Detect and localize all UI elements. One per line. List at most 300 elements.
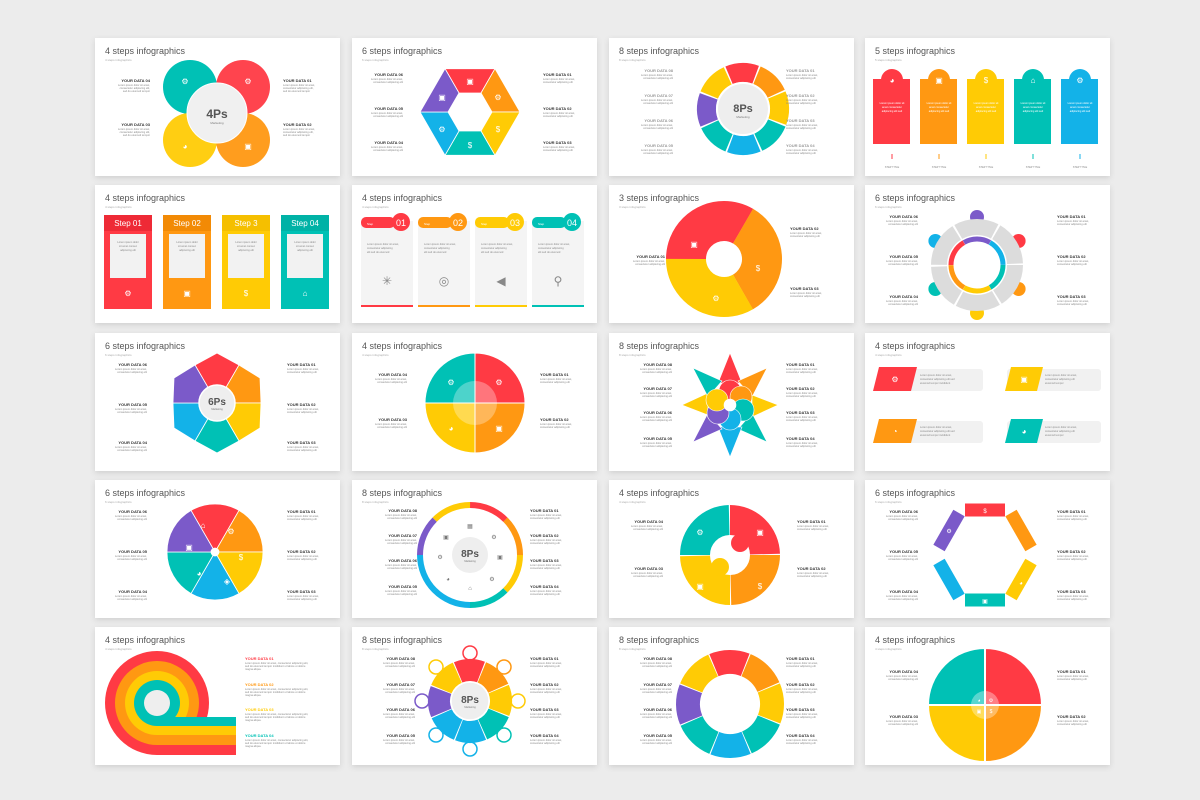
- slide 14: 8Ps thin ring: Lorem ipsum dolor sit amet,: [385, 563, 417, 567]
- slide 9: 6Ps star: Lorem ipsum dolor sit amet,: [287, 367, 319, 371]
- slide 1: 4Ps venn: sed do eiusmod tempor: [283, 89, 310, 93]
- slide 9: 6Ps star: Lorem ipsum dolor sit amet,: [115, 445, 147, 449]
- slide 11: 8 steps star: Lorem ipsum dolor sit amet,: [640, 441, 672, 445]
- slide 4: 5 steps tabs: Lorem ipsum dolor sit: [1068, 101, 1093, 105]
- slide 14: 8Ps thin ring: consectetur adipiscing elit: [387, 541, 417, 545]
- slide 8: 6 steps ring: Lorem ipsum dolor sit amet,: [1057, 259, 1089, 263]
- slide 17: rainbow spiral: magna aliqua.: [245, 744, 262, 748]
- slide 8: 6 steps ring: Lorem ipsum dolor sit amet,: [886, 259, 918, 263]
- slide 9: 6Ps star: Lorem ipsum dolor sit amet,: [287, 445, 319, 449]
- slide 11: 8 steps star: YOUR DATA 04: [786, 436, 815, 441]
- slide 10: 4 quadrant pie: 4 steps infographics: [362, 341, 443, 351]
- slide 19: 8 steps donut: Lorem ipsum dolor sit amet,: [640, 738, 672, 742]
- slide 11: 8 steps star: Lorem ipsum dolor sit amet,: [786, 415, 818, 419]
- slide 11: 8 steps star: consectetur adipiscing elit: [642, 370, 672, 374]
- slide 13: 6 steps fan: consectetur adipiscing elit: [117, 517, 147, 521]
- slide 2: 6 steps hexagon: ▣: [438, 93, 446, 102]
- slide 4: 5 steps tabs: STEP TITLE: [932, 165, 946, 169]
- slide 16: 6 steps hexagon outline: Lorem ipsum dolor sit amet,: [886, 514, 918, 518]
- slide 18: 8Ps with tabs: 8 steps infographics: [362, 635, 443, 645]
- slide 19: 8 steps donut: consectetur adipiscing elit: [786, 715, 816, 719]
- slide 14: 8Ps thin ring: Lorem ipsum dolor sit amet,: [530, 538, 562, 542]
- slide 12: 4 parallelogram items: Lorem ipsum dolor sit amet,: [1045, 425, 1077, 429]
- slide 13: 6 steps fan: Lorem ipsum dolor sit amet,: [287, 594, 319, 598]
- slide 5: step columns: adipiscing elit: [297, 248, 313, 252]
- slide 10: 4 quadrant pie: 4 steps infographics: [362, 353, 389, 357]
- slide 14: 8Ps thin ring: consectetur adipiscing elit: [530, 592, 560, 596]
- slide 1: 4Ps venn: Lorem ipsum dolor sit amet,: [118, 127, 150, 131]
- slide 4: 5 steps tabs: 5 steps infographics: [875, 46, 956, 56]
- slide 4: 5 steps tabs: amet consectetur: [1070, 105, 1090, 109]
- slide 17: rainbow spiral: sed do eiusmod tempor incididunt ut labore et dolore: [245, 715, 306, 719]
- slide 13: 6 steps fan: Lorem ipsum dolor sit amet,: [287, 554, 319, 558]
- slide 5: step columns: sit amet consec: [178, 244, 197, 248]
- slide 4: 5 steps tabs: Lorem ipsum dolor sit: [880, 101, 905, 105]
- slide 10: 4 quadrant pie: ◕: [449, 424, 454, 433]
- slide 2: 6 steps hexagon: ⚙: [438, 125, 446, 134]
- slide 14: 8Ps thin ring: 8 steps infographics: [362, 500, 389, 504]
- slide 4: 5 steps tabs: Lorem ipsum dolor sit: [1021, 101, 1046, 105]
- slide 16: 6 steps hexagon outline: YOUR DATA 02: [1057, 549, 1086, 554]
- slide 6: step cards: elit sed do eiusmod: [424, 250, 447, 254]
- slide 5: step columns: Step 04: [291, 219, 319, 228]
- slide 6: step cards: elit sed do eiusmod: [367, 250, 390, 254]
- slide 6: step cards: ◎: [439, 274, 449, 288]
- slide 12: 4 parallelogram items: Lorem ipsum dolor sit amet,: [920, 425, 952, 429]
- slide 2: 6 steps hexagon: consectetur adipiscing elit: [543, 148, 573, 152]
- slide 3: 8Ps donut: [609, 38, 854, 176]
- slide 1: 4Ps venn: 4 steps infographics: [105, 46, 186, 56]
- slide 3: 8Ps donut: Lorem ipsum dolor sit amet,: [641, 123, 673, 127]
- slide 2: 6 steps hexagon: consectetur adipiscing elit: [543, 114, 573, 118]
- slide 16: 6 steps hexagon outline: YOUR DATA 03: [1057, 589, 1086, 594]
- slide 18: 8Ps with tabs: Lorem ipsum dolor sit amet,: [383, 687, 415, 691]
- slide 19: 8 steps donut: 8 steps infographics: [619, 647, 646, 651]
- slide 11: 8 steps star: Lorem ipsum dolor sit amet,: [786, 391, 818, 395]
- slide 19: 8 steps donut: YOUR DATA 07: [643, 682, 673, 687]
- slide 14: 8Ps thin ring: Lorem ipsum dolor sit amet,: [385, 589, 417, 593]
- slide 4: 5 steps tabs: ⚙: [1076, 76, 1084, 85]
- slide 12: 4 parallelogram items: ◔: [893, 427, 898, 436]
- slide 20: 4 quadrant circle: ⚙: [989, 698, 994, 704]
- slide 9: 6Ps star: consectetur adipiscing elit: [117, 448, 147, 452]
- slide 15: 4 steps puzzle ring: $: [758, 582, 763, 591]
- slide 16: 6 steps hexagon outline: 6 steps infographics: [875, 488, 956, 498]
- slide 11: 8 steps star: YOUR DATA 07: [643, 386, 673, 391]
- slide 14: 8Ps thin ring: ⌂: [468, 586, 472, 592]
- slide 2: 6 steps hexagon: Lorem ipsum dolor sit amet,: [371, 77, 403, 81]
- slide 3: 8Ps donut: YOUR DATA 06: [644, 118, 674, 123]
- slide 9: 6Ps star: Lorem ipsum dolor sit amet,: [115, 367, 147, 371]
- slide 7: 3 steps puzzle circle: ▣: [690, 240, 698, 249]
- slide 4: 5 steps tabs: adipiscing elit sed: [976, 109, 997, 113]
- slide 19: 8 steps donut: 8 steps infographics: [619, 635, 700, 645]
- slide 3: 8Ps donut: consectetur adipiscing elit: [786, 151, 816, 155]
- slide 4: 5 steps tabs: 5 steps infographics: [875, 58, 902, 62]
- slide 1: 4Ps venn: Lorem ipsum dolor sit amet,: [283, 83, 315, 87]
- slide 1: 4Ps venn: consectetur adipiscing elit,: [120, 86, 150, 90]
- slide 1: 4Ps venn: YOUR DATA 04: [121, 78, 151, 83]
- slide 2: 6 steps hexagon: YOUR DATA 05: [374, 106, 404, 111]
- slide 17: rainbow spiral: magna aliqua.: [245, 693, 262, 697]
- slide 17: rainbow spiral: sed do eiusmod tempor incididunt ut labore et dolore: [245, 741, 306, 745]
- slide 14: 8Ps thin ring: consectetur adipiscing elit: [530, 566, 560, 570]
- slide 3: 8Ps donut: 8Ps: [733, 103, 753, 115]
- slide 16: 6 steps hexagon outline: ▣: [982, 599, 988, 605]
- slide 2: 6 steps hexagon: $: [496, 125, 501, 134]
- slide 4: 5 steps tabs: STEP TITLE: [885, 165, 899, 169]
- slide 6: step cards: 4 steps infographics: [362, 193, 443, 203]
- slide 3: 8Ps donut: YOUR DATA 01: [786, 68, 815, 73]
- slide 11: 8 steps star: Lorem ipsum dolor sit amet,: [640, 391, 672, 395]
- slide 9: 6Ps star: consectetur adipiscing elit: [287, 448, 317, 452]
- slide 11: 8 steps star: 8 steps infographics: [619, 341, 700, 351]
- slide 4: 5 steps tabs: [865, 38, 1110, 176]
- slide 20: 4 quadrant circle: Lorem ipsum dolor sit amet,: [886, 674, 918, 678]
- slide 14: 8Ps thin ring: [352, 480, 597, 626]
- slide 5: step columns: adipiscing elit: [179, 248, 195, 252]
- slide 16: 6 steps hexagon outline: YOUR DATA 06: [889, 509, 919, 514]
- slide 2: 6 steps hexagon: consectetur adipiscing elit: [543, 80, 573, 84]
- slide 19: 8 steps donut: consectetur adipiscing elit: [786, 664, 816, 668]
- slide 18: 8Ps with tabs: Lorem ipsum dolor sit amet,: [383, 738, 415, 742]
- slide 3: 8Ps donut: YOUR DATA 03: [786, 118, 815, 123]
- slide 6: step cards: Step: [481, 222, 488, 226]
- slide 3: 8Ps donut: YOUR DATA 05: [644, 143, 674, 148]
- slide 12: 4 parallelogram items: consectetur adipiscing elit: [1045, 429, 1075, 433]
- slide 3: 8Ps donut: Lorem ipsum dolor sit amet,: [786, 73, 818, 77]
- slide 8: 6 steps ring: [865, 185, 1110, 323]
- slide 6: step cards: Lorem ipsum dolor sit amet,: [481, 242, 513, 246]
- slide 18: 8Ps with tabs: Lorem ipsum dolor sit amet,: [530, 661, 562, 665]
- slide 8: 6 steps ring: consectetur adipiscing elit: [1057, 302, 1087, 306]
- slide 1: 4Ps venn: YOUR DATA 03: [121, 122, 151, 127]
- slide 14: 8Ps thin ring: YOUR DATA 02: [530, 533, 559, 538]
- slide 10: 4 quadrant pie: ⚙: [495, 378, 503, 387]
- slide 3: 8Ps donut: Lorem ipsum dolor sit amet,: [786, 123, 818, 127]
- slide 6: step cards: Step: [424, 222, 431, 226]
- slide 7: 3 steps puzzle circle: Lorem ipsum dolor sit amet,: [790, 231, 822, 235]
- slide 17: rainbow spiral: sed do eiusmod tempor incididunt ut labore et dolore: [245, 664, 306, 668]
- slide 19: 8 steps donut: YOUR DATA 02: [786, 682, 815, 687]
- slide 17: rainbow spiral: YOUR DATA 02: [245, 682, 274, 687]
- slide 1: 4Ps venn: sed do eiusmod tempor: [123, 89, 150, 93]
- slide 5: step columns: sit amet consec: [237, 244, 256, 248]
- slide 1: 4Ps venn: consectetur adipiscing elit,: [283, 130, 314, 134]
- slide 17: rainbow spiral: Lorem ipsum dolor sit amet, consectetur adipiscing elit,: [245, 687, 308, 691]
- slide 16: 6 steps hexagon outline: Lorem ipsum dolor sit amet,: [1057, 514, 1089, 518]
- slide 2: 6 steps hexagon: 6 steps infographics: [362, 46, 443, 56]
- slide 20: 4 quadrant circle: consectetur adipiscing elit: [1057, 677, 1087, 681]
- slide 6: step cards: consectetur adipiscing: [538, 246, 564, 250]
- slide 16: 6 steps hexagon outline: Lorem ipsum dolor sit amet,: [886, 594, 918, 598]
- slide 10: 4 quadrant pie: YOUR DATA 01: [540, 372, 569, 377]
- slide 10: 4 quadrant pie: Lorem ipsum dolor sit amet,: [540, 422, 572, 426]
- slide 20: 4 quadrant circle: YOUR DATA 04: [889, 669, 919, 674]
- slide 10: 4 quadrant pie: Lorem ipsum dolor sit amet,: [375, 377, 407, 381]
- slide 14: 8Ps thin ring: YOUR DATA 08: [388, 508, 418, 513]
- slide 13: 6 steps fan: 6 steps infographics: [105, 500, 132, 504]
- slide 19: 8 steps donut: Lorem ipsum dolor sit amet,: [640, 661, 672, 665]
- slide 10: 4 quadrant pie: YOUR DATA 02: [540, 417, 569, 422]
- slide 18: 8Ps with tabs: YOUR DATA 05: [386, 733, 416, 738]
- slide 18: 8Ps with tabs: consectetur adipiscing elit: [385, 715, 415, 719]
- slide 12: 4 parallelogram items: consectetur adipiscing elit sed: [920, 429, 955, 433]
- slide 9: 6Ps star: YOUR DATA 03: [287, 440, 316, 445]
- slide 2: 6 steps hexagon: Lorem ipsum dolor sit amet,: [543, 145, 575, 149]
- slide 14: 8Ps thin ring: YOUR DATA 05: [388, 584, 418, 589]
- slide 14: 8Ps thin ring: Lorem ipsum dolor sit amet,: [530, 563, 562, 567]
- slide 19: 8 steps donut: YOUR DATA 08: [643, 656, 673, 661]
- slide 2: 6 steps hexagon: consectetur adipiscing elit: [373, 80, 403, 84]
- slide 16: 6 steps hexagon outline: Lorem ipsum dolor sit amet,: [1057, 554, 1089, 558]
- slide 6: step cards: Step: [538, 222, 545, 226]
- slide 14: 8Ps thin ring: consectetur adipiscing elit: [387, 516, 417, 520]
- slide 20: 4 quadrant circle: ▣: [977, 709, 982, 715]
- slide 20: 4 quadrant circle: YOUR DATA 03: [889, 714, 919, 719]
- slide 18: 8Ps with tabs: consectetur adipiscing elit: [530, 741, 560, 745]
- slide 5: step columns: Step 01: [114, 219, 142, 228]
- slide 16: 6 steps hexagon outline: ◕: [1019, 581, 1023, 587]
- slide 11: 8 steps star: consectetur adipiscing elit: [642, 394, 672, 398]
- slide 10: 4 quadrant pie: Lorem ipsum dolor sit amet,: [375, 422, 407, 426]
- slide 13: 6 steps fan: YOUR DATA 06: [118, 509, 148, 514]
- slide 7: 3 steps puzzle circle: Lorem ipsum dolor sit amet,: [633, 259, 665, 263]
- slide 9: 6Ps star: consectetur adipiscing elit: [287, 410, 317, 414]
- slide 16: 6 steps hexagon outline: $: [983, 509, 987, 515]
- slide 11: 8 steps star: consectetur adipiscing elit: [786, 418, 816, 422]
- slide 20: 4 quadrant circle: Lorem ipsum dolor sit amet,: [886, 719, 918, 723]
- slide 19: 8 steps donut: Lorem ipsum dolor sit amet,: [786, 687, 818, 691]
- slide 10: 4 quadrant pie: consectetur adipiscing elit: [377, 380, 407, 384]
- slide 1: 4Ps venn: ◕: [183, 142, 188, 151]
- slide 8: 6 steps ring: Lorem ipsum dolor sit amet,: [1057, 299, 1089, 303]
- slide 6: step cards: 02: [453, 218, 463, 228]
- slide 16: 6 steps hexagon outline: Lorem ipsum dolor sit amet,: [1057, 594, 1089, 598]
- slide 12: 4 parallelogram items: ◕: [1022, 427, 1027, 436]
- slide 9: 6Ps star: consectetur adipiscing elit: [287, 370, 317, 374]
- slide 4: 5 steps tabs: amet consectetur: [882, 105, 902, 109]
- slide 8: 6 steps ring: Lorem ipsum dolor sit amet,: [886, 219, 918, 223]
- slide 13: 6 steps fan: YOUR DATA 01: [287, 509, 316, 514]
- slide 18: 8Ps with tabs: Lorem ipsum dolor sit amet,: [383, 712, 415, 716]
- slide 1: 4Ps venn: ⚙: [244, 77, 252, 86]
- slide 4: 5 steps tabs: $: [984, 76, 989, 85]
- slide 17: rainbow spiral: magna aliqua.: [245, 718, 262, 722]
- slide 4: 5 steps tabs: STEP TITLE: [1026, 165, 1040, 169]
- slide 15: 4 steps puzzle ring: 4 steps infographics: [619, 500, 646, 504]
- slide 4: 5 steps tabs: amet consectetur: [976, 105, 996, 109]
- slide 18: 8Ps with tabs: YOUR DATA 08: [386, 656, 416, 661]
- slide 18: 8Ps with tabs: Lorem ipsum dolor sit amet,: [383, 661, 415, 665]
- slide 14: 8Ps thin ring: consectetur adipiscing elit: [530, 516, 560, 520]
- slide 5: step columns: [95, 185, 340, 323]
- slide 11: 8 steps star: consectetur adipiscing elit: [642, 444, 672, 448]
- slide 7: 3 steps puzzle circle: consectetur adipiscing elit: [790, 294, 820, 298]
- slide 1: 4Ps venn: ▣: [244, 142, 252, 151]
- slide 13: 6 steps fan: ⌂: [201, 521, 206, 530]
- slide 15: 4 steps puzzle ring: Lorem ipsum dolor sit amet,: [631, 571, 663, 575]
- slide 10: 4 quadrant pie: YOUR DATA 03: [378, 417, 408, 422]
- slide 11: 8 steps star: Lorem ipsum dolor sit amet,: [786, 367, 818, 371]
- slide 14: 8Ps thin ring: ▣: [497, 555, 503, 561]
- slide 15: 4 steps puzzle ring: consectetur adipiscing elit: [797, 527, 827, 531]
- slide 18: 8Ps with tabs: Lorem ipsum dolor sit amet,: [530, 738, 562, 742]
- slide 5: step columns: Lorem ipsum dolor: [117, 240, 139, 244]
- slide 6: step cards: Lorem ipsum dolor sit amet,: [367, 242, 399, 246]
- slide 13: 6 steps fan: consectetur adipiscing elit: [117, 557, 147, 561]
- slide 3: 8Ps donut: consectetur adipiscing elit: [786, 126, 816, 130]
- slide 18: 8Ps with tabs: Lorem ipsum dolor sit amet,: [530, 712, 562, 716]
- slide 14: 8Ps thin ring: YOUR DATA 07: [388, 533, 418, 538]
- slide 2: 6 steps hexagon: ⚙: [494, 93, 502, 102]
- slide 3: 8Ps donut: Lorem ipsum dolor sit amet,: [786, 148, 818, 152]
- slide 19: 8 steps donut: consectetur adipiscing elit: [642, 690, 672, 694]
- slide 14: 8Ps thin ring: Marketing: [464, 559, 476, 563]
- slide 5: step columns: Lorem ipsum dolor: [235, 240, 257, 244]
- slide 3: 8Ps donut: consectetur adipiscing elit: [786, 76, 816, 80]
- slide 1: 4Ps venn: YOUR DATA 02: [283, 122, 312, 127]
- slide 17: rainbow spiral: magna aliqua.: [245, 667, 262, 671]
- slide 8: 6 steps ring: 6 steps infographics: [875, 193, 956, 203]
- slide 14: 8Ps thin ring: Lorem ipsum dolor sit amet,: [530, 513, 562, 517]
- slide 20: 4 quadrant circle: YOUR DATA 01: [1057, 669, 1086, 674]
- slide 20: 4 quadrant circle: Lorem ipsum dolor sit amet,: [1057, 719, 1089, 723]
- slide 6: step cards: Step: [367, 222, 374, 226]
- slide 14: 8Ps thin ring: Lorem ipsum dolor sit amet,: [530, 589, 562, 593]
- slide 10: 4 quadrant pie: consectetur adipiscing elit: [540, 380, 570, 384]
- slide 6: step cards: ✳: [382, 274, 392, 288]
- slide 2: 6 steps hexagon: Lorem ipsum dolor sit amet,: [543, 77, 575, 81]
- slide 7: 3 steps puzzle circle: YOUR DATA 02: [790, 226, 819, 231]
- slide 11: 8 steps star: consectetur adipiscing elit: [786, 444, 816, 448]
- slide 11: 8 steps star: consectetur adipiscing elit: [642, 418, 672, 422]
- slide 13: 6 steps fan: consectetur adipiscing elit: [287, 597, 317, 601]
- slide 4: 5 steps tabs: ⌂: [1031, 76, 1036, 85]
- slide 5: step columns: sit amet consec: [119, 244, 138, 248]
- slide 12: 4 parallelogram items: 4 steps infographics: [875, 341, 956, 351]
- slide 14: 8Ps thin ring: ▦: [467, 524, 473, 530]
- slide 13: 6 steps fan: consectetur adipiscing elit: [287, 557, 317, 561]
- slide 18: 8Ps with tabs: consectetur adipiscing elit: [385, 741, 415, 745]
- slide 4: 5 steps tabs: amet consectetur: [1023, 105, 1043, 109]
- slide 12: 4 parallelogram items: eiusmod tempor incididunt: [920, 433, 951, 437]
- slide 9: 6Ps star: YOUR DATA 02: [287, 402, 316, 407]
- slide 16: 6 steps hexagon outline: ⚙: [946, 528, 952, 535]
- slide 18: 8Ps with tabs: [352, 627, 597, 765]
- slide 15: 4 steps puzzle ring: Lorem ipsum dolor sit amet,: [631, 524, 663, 528]
- slide 1: 4Ps venn: consectetur adipiscing elit,: [283, 86, 314, 90]
- slide 8: 6 steps ring: YOUR DATA 03: [1057, 294, 1086, 299]
- slide 8: 6 steps ring: consectetur adipiscing elit: [1057, 222, 1087, 226]
- slide 8: 6 steps ring: Lorem ipsum dolor sit amet,: [886, 299, 918, 303]
- slide 9: 6Ps star: YOUR DATA 06: [118, 362, 148, 367]
- slide 4: 5 steps tabs: Lorem ipsum dolor sit: [927, 101, 952, 105]
- slide 7: 3 steps puzzle circle: 3 steps infographics: [619, 205, 646, 209]
- slide 17: rainbow spiral: Lorem ipsum dolor sit amet, consectetur adipiscing elit,: [245, 738, 308, 742]
- slide 2: 6 steps hexagon: $: [468, 141, 473, 150]
- slide 20: 4 quadrant circle: consectetur adipiscing elit: [888, 722, 918, 726]
- slide 13: 6 steps fan: consectetur adipiscing elit: [117, 597, 147, 601]
- slide 4: 5 steps tabs: ▣: [935, 76, 943, 85]
- slide 3: 8Ps donut: YOUR DATA 08: [644, 68, 674, 73]
- slide 11: 8 steps star: consectetur adipiscing elit: [786, 394, 816, 398]
- slide 17: rainbow spiral: Lorem ipsum dolor sit amet, consectetur adipiscing elit,: [245, 712, 308, 716]
- slide 18: 8Ps with tabs: YOUR DATA 06: [386, 707, 416, 712]
- slide 8: 6 steps ring: YOUR DATA 02: [1057, 254, 1086, 259]
- slide 7: 3 steps puzzle circle: 3 steps infographics: [619, 193, 700, 203]
- slide 5: step columns: adipiscing elit: [120, 248, 136, 252]
- slide 8: 6 steps ring: YOUR DATA 06: [889, 214, 919, 219]
- slide 13: 6 steps fan: ◕: [197, 569, 202, 578]
- slide 4: 5 steps tabs: adipiscing elit sed: [882, 109, 903, 113]
- slide 20: 4 quadrant circle: [865, 627, 1110, 765]
- slide 16: 6 steps hexagon outline: YOUR DATA 04: [889, 589, 919, 594]
- slide 13: 6 steps fan: consectetur adipiscing elit: [287, 517, 317, 521]
- slide 17: rainbow spiral: 4 steps infographics: [105, 647, 132, 651]
- slide 19: 8 steps donut: consectetur adipiscing elit: [642, 664, 672, 668]
- slide 6: step cards: consectetur adipiscing: [367, 246, 393, 250]
- slide 6: step cards: 03: [510, 218, 520, 228]
- slide 20: 4 quadrant circle: Lorem ipsum dolor sit amet,: [1057, 674, 1089, 678]
- slide 7: 3 steps puzzle circle: $: [756, 264, 761, 273]
- slide 6: step cards: consectetur adipiscing: [481, 246, 507, 250]
- slide 16: 6 steps hexagon outline: 6 steps infographics: [875, 500, 902, 504]
- slide 9: 6Ps star: Marketing: [211, 407, 223, 411]
- slide 13: 6 steps fan: YOUR DATA 03: [287, 589, 316, 594]
- slide 1: 4Ps venn: Lorem ipsum dolor sit amet,: [118, 83, 150, 87]
- slide 9: 6Ps star: YOUR DATA 05: [118, 402, 148, 407]
- slide 14: 8Ps thin ring: 8Ps: [461, 549, 479, 560]
- slide 3: 8Ps donut: Marketing: [736, 115, 750, 119]
- slide 19: 8 steps donut: consectetur adipiscing elit: [642, 715, 672, 719]
- slide 15: 4 steps puzzle ring: consectetur adipiscing elit: [633, 574, 663, 578]
- slide 20: 4 quadrant circle: ◕: [977, 698, 981, 704]
- slide 18: 8Ps with tabs: YOUR DATA 03: [530, 707, 559, 712]
- slide 19: 8 steps donut: YOUR DATA 03: [786, 707, 815, 712]
- slide 18: 8Ps with tabs: YOUR DATA 07: [386, 682, 416, 687]
- slide 19: 8 steps donut: YOUR DATA 05: [643, 733, 673, 738]
- slide 18: 8Ps with tabs: Marketing: [464, 705, 476, 709]
- slide 3: 8Ps donut: Lorem ipsum dolor sit amet,: [641, 73, 673, 77]
- slide 17: rainbow spiral: 4 steps infographics: [105, 635, 186, 645]
- slide 16: 6 steps hexagon outline: [865, 480, 1110, 618]
- slide 11: 8 steps star: Lorem ipsum dolor sit amet,: [786, 441, 818, 445]
- slide 19: 8 steps donut: Lorem ipsum dolor sit amet,: [640, 687, 672, 691]
- slide 11: 8 steps star: YOUR DATA 01: [786, 362, 815, 367]
- slide 9: 6Ps star: YOUR DATA 01: [287, 362, 316, 367]
- slide 14: 8Ps thin ring: consectetur adipiscing elit: [387, 592, 417, 596]
- slide 11: 8 steps star: consectetur adipiscing elit: [786, 370, 816, 374]
- slide 2: 6 steps hexagon: consectetur adipiscing elit: [373, 114, 403, 118]
- slide 13: 6 steps fan: YOUR DATA 04: [118, 589, 148, 594]
- slide 8: 6 steps ring: consectetur adipiscing elit: [888, 302, 918, 306]
- slide 11: 8 steps star: [609, 333, 854, 471]
- slide 6: step cards: elit sed do eiusmod: [538, 250, 561, 254]
- slide 14: 8Ps thin ring: YOUR DATA 04: [530, 584, 559, 589]
- slide 19: 8 steps donut: consectetur adipiscing elit: [786, 741, 816, 745]
- slide 15: 4 steps puzzle ring: [609, 480, 854, 618]
- slide 13: 6 steps fan: [95, 480, 340, 618]
- slide 13: 6 steps fan: 6 steps infographics: [105, 488, 186, 498]
- slide 2: 6 steps hexagon: YOUR DATA 03: [543, 140, 572, 145]
- slide 5: step columns: 4 steps infographics: [105, 193, 186, 203]
- slide 1: 4Ps venn: sed do eiusmod tempor: [123, 133, 150, 137]
- slide 16: 6 steps hexagon outline: consectetur adipiscing elit: [1057, 517, 1087, 521]
- slide 18: 8Ps with tabs: consectetur adipiscing elit: [385, 664, 415, 668]
- slide 19: 8 steps donut: YOUR DATA 04: [786, 733, 815, 738]
- slide 6: step cards: Lorem ipsum dolor sit amet,: [424, 242, 456, 246]
